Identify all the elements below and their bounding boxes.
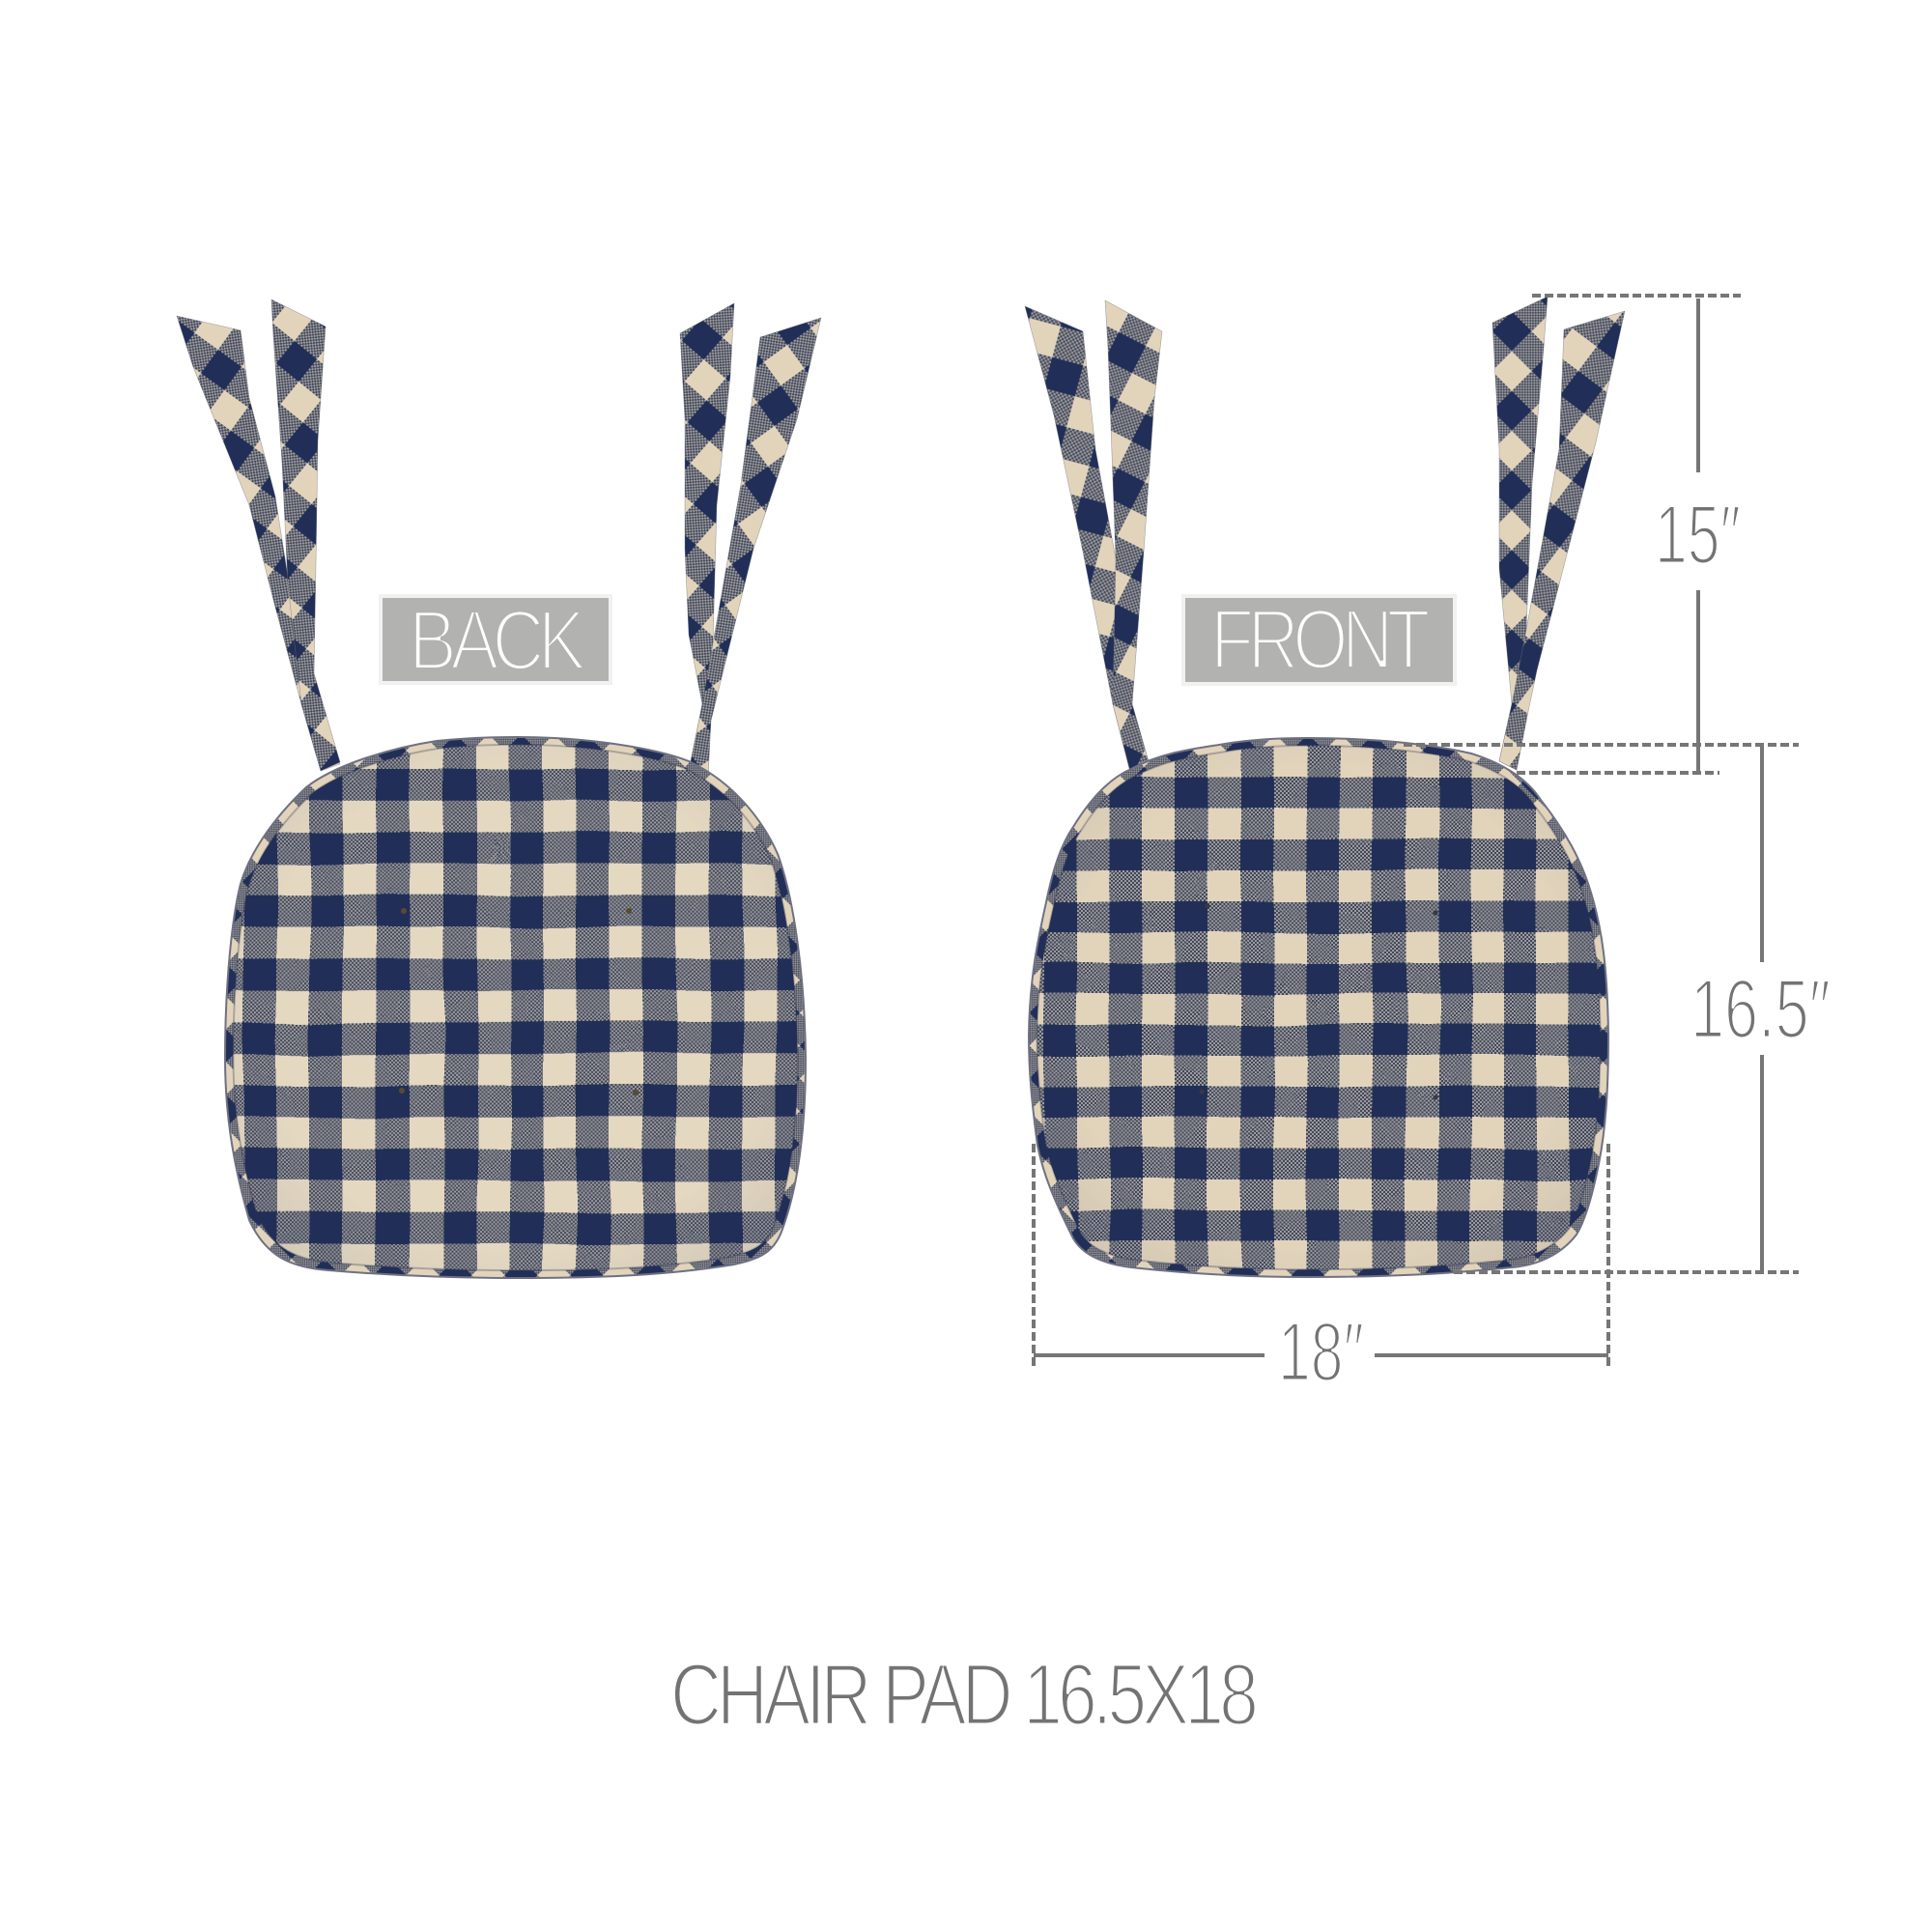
ties: back left pair <box>177 299 340 771</box>
dimension: tie length 15 inches: 15″ <box>1655 489 1741 582</box>
label: FRONT: FRONT <box>1210 591 1429 687</box>
cushion: front gingham pad <box>1028 737 1609 1278</box>
label: BACK: BACK <box>409 592 585 688</box>
dimension: pad width 18 inches: 18″ <box>1278 1306 1364 1399</box>
product: front view chair pad <box>1005 297 1633 1304</box>
ties: front left pair <box>1025 300 1162 772</box>
product: back view chair pad <box>177 299 831 1304</box>
cushion: back gingham pad <box>224 736 807 1279</box>
title: product size caption: CHAIR PAD 16.5X18 <box>670 1647 1256 1744</box>
ties: front right pair <box>1492 297 1625 770</box>
dimension: pad depth 16.5 inches: 16.5″ <box>1690 963 1831 1056</box>
ties: back right pair <box>680 303 821 777</box>
